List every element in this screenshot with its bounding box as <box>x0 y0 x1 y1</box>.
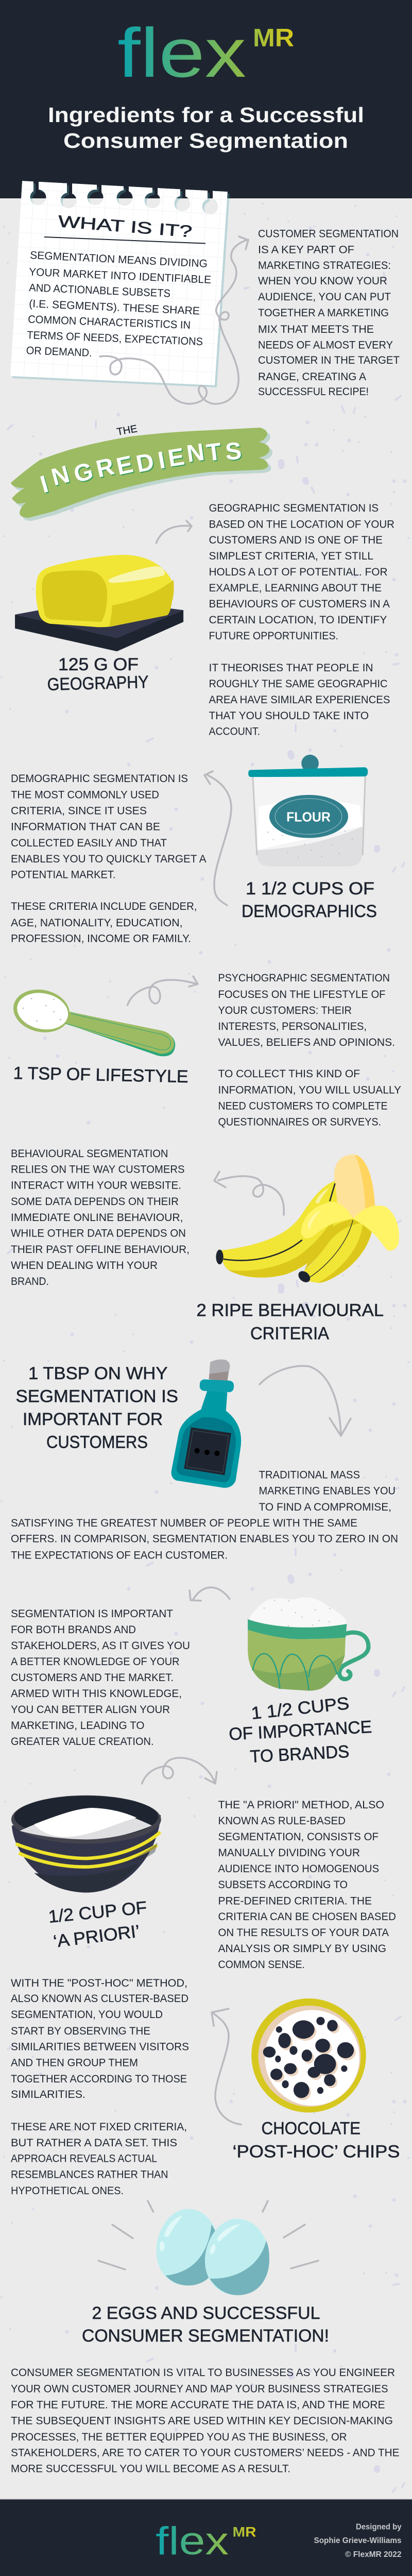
text: demographic segmentation: THE MOST COMMONLY USED <box>11 789 159 801</box>
note heading: WHAT IS IT? <box>57 212 193 241</box>
text: a priori method: COMMON SENSE. <box>218 1959 305 1971</box>
text: traditional mass marketing: OFFERS. IN COMPARISON, SEGMENTATION ENABLES YOU TO ZERO IN ON <box>11 1533 398 1545</box>
note body text: AND ACTIONABLE SUBSETS <box>29 282 171 300</box>
text: post-hoc method: SEGMENTATION, YOU WOULD <box>11 2009 163 2021</box>
footer logo: flex <box>156 2519 229 2563</box>
text: closing paragraph: PROCESSES, THE BETTER EQUIPPED YOU AS THE BUSINESS, OR <box>11 2431 347 2443</box>
note shadow <box>12 183 230 387</box>
designer credits: © FlexMR 2022 <box>345 2550 402 2559</box>
designer credits: Designed by <box>356 2522 402 2532</box>
label: chocolate post-hoc chips <box>233 2119 400 2162</box>
footer logo <box>156 2519 256 2563</box>
title: Consumer Segmentation <box>63 129 348 152</box>
text: segmentation importance: YOU CAN BETTER ALIGN YOUR <box>11 1704 170 1716</box>
text: segmentation importance: CUSTOMERS AND THE MARKET. <box>11 1672 174 1684</box>
label: 1 tbsp on why segmentation is important <box>15 1364 178 1452</box>
text: segmentation importance: ARMED WITH THIS KNOWLEDGE, <box>11 1688 182 1700</box>
text: psychographic segmentation: NEED CUSTOMERS TO COMPLETE <box>218 1100 387 1112</box>
text: traditional mass marketing: TO FIND A COMPROMISE, <box>259 1501 391 1513</box>
text: behavioural segmentation: RELIES ON THE WAY CUSTOMERS <box>11 1163 184 1176</box>
label: 1 tsp of lifestyle: 1 TSP OF LIFESTYLE <box>13 1063 188 1087</box>
arrow: cup to importance text <box>190 1587 230 1601</box>
text: geographic segmentation: HOLDS A LOT OF POTENTIAL. FOR <box>209 566 387 578</box>
text: psychographic segmentation: YOUR CUSTOMERS: THEIR <box>218 1005 352 1016</box>
arrow: squiggle from note to intro text <box>100 236 248 404</box>
rays <box>98 2201 318 2269</box>
text: behavioural segmentation: SOME DATA DEPENDS ON THEIR <box>11 1196 179 1208</box>
icon: bananas <box>216 1155 399 1284</box>
text: post-hoc method: TOGETHER ACCORDING TO THOSE <box>11 2073 187 2085</box>
icon: mixing bowl <box>11 1795 161 1892</box>
label: 2 eggs and successful consumer segmentation: 2 EGGS AND SUCCESSFUL <box>92 2303 320 2323</box>
text: segmentation importance <box>11 1608 190 1748</box>
text: traditional mass marketing <box>11 1469 398 1561</box>
text: customer segmentation intro: CUSTOMER IN THE TARGET <box>258 354 400 366</box>
footer band <box>0 2499 412 2576</box>
text: psychographic segmentation: PSYCHOGRAPHIC SEGMENTATION <box>218 972 390 984</box>
banner brush <box>11 428 269 518</box>
text: geographic segmentation: IT THEORISES THAT PEOPLE IN <box>209 662 373 674</box>
text: traditional mass marketing: SATISFYING THE GREATEST NUMBER OF PEOPLE WITH THE SAME <box>11 1517 357 1529</box>
text: behavioural segmentation: IMMEDIATE ONLINE BEHAVIOUR, <box>11 1212 183 1224</box>
text: demographic segmentation: DEMOGRAPHIC SEGMENTATION IS <box>11 773 188 785</box>
text: psychographic segmentation: QUESTIONNAIRES OR SURVEYS. <box>218 1116 381 1128</box>
text: customer segmentation intro: MARKETING STRATEGIES: <box>258 260 391 272</box>
text: geographic segmentation: CUSTOMERS AND IS ONE OF THE <box>209 534 383 546</box>
text: geographic segmentation: BEHAVIOURS OF CUSTOMERS IN A <box>209 598 390 610</box>
text: demographic segmentation: CRITERIA, SINCE IT USES <box>11 805 147 817</box>
label: 1 1/2 cups of importance to brands: OF IMPORTANCE <box>228 1717 372 1744</box>
text: a priori method: KNOWN AS RULE-BASED <box>218 1815 346 1827</box>
text: customer segmentation intro: CUSTOMER SEGMENTATION <box>258 228 399 240</box>
text: a priori method: ANALYSIS OR SIMPLY BY USING <box>218 1943 386 1955</box>
label: 125 g of geography: GEOGRAPHY <box>47 672 149 694</box>
header logo: MR <box>253 24 294 52</box>
text: post-hoc method: START BY OBSERVING THE <box>11 2025 150 2037</box>
text: closing paragraph: THE SUBSEQUENT INSIGHTS ARE USED WITHIN KEY DECISION-MAKING <box>11 2415 393 2427</box>
text: segmentation importance: GREATER VALUE CREATION. <box>11 1736 153 1748</box>
text: customer segmentation intro: SUCCESSFUL RECIPE! <box>258 386 369 398</box>
arrow: bottle to traditional text <box>260 1366 351 1436</box>
text: geographic segmentation: EXAMPLE, LEARNING ABOUT THE <box>209 582 382 594</box>
text: behavioural segmentation: WHILE OTHER DATA DEPENDS ON <box>11 1227 186 1240</box>
header logo <box>117 14 294 92</box>
text: post-hoc method: AND THEN GROUP THEM <box>11 2057 138 2069</box>
label: chocolate post-hoc chips: CHOCOLATE <box>262 2119 360 2138</box>
text: traditional mass marketing: TRADITIONAL MASS <box>259 1469 360 1481</box>
panel: what is it note <box>10 181 230 387</box>
icon: bottle <box>171 1360 241 1488</box>
label: 1 1/2 cups of demographics: 1 1/2 CUPS OF <box>246 879 374 899</box>
text: geographic segmentation: ACCOUNT. <box>209 725 260 738</box>
text: a priori method: ON THE RESULTS OF YOUR DATA <box>218 1927 389 1939</box>
text: customer segmentation intro: RANGE, CREATING A <box>258 371 366 383</box>
label: 125 g of geography <box>47 655 149 694</box>
text: behavioural segmentation <box>11 1148 190 1287</box>
text: a priori method: AUDIENCE INTO HOMOGENOUS <box>218 1863 379 1875</box>
text: geographic segmentation: GEOGRAPHIC SEGMENTATION IS <box>209 502 379 514</box>
text: behavioural segmentation: BRAND. <box>11 1276 49 1287</box>
text: geographic segmentation: SIMPLEST CRITERIA, YET STILL <box>209 550 373 562</box>
text: traditional mass marketing: MARKETING ENABLES YOU <box>259 1485 396 1497</box>
text: geographic segmentation: ROUGHLY THE SAME GEOGRAPHIC <box>209 678 387 690</box>
text: demographic segmentation: AGE, NATIONALITY, EDUCATION, <box>11 917 182 929</box>
arrow: bowl to a priori text <box>142 1758 217 1784</box>
banner: the ingredients: THE <box>116 423 138 438</box>
label: 1 tbsp on why segmentation is important: SEGMENTATION IS <box>15 1387 178 1406</box>
arrow: cookie to post-hoc text <box>212 2009 241 2125</box>
label: 2 eggs and successful consumer segmentation: CONSUMER SEGMENTATION! <box>82 2326 329 2346</box>
text: segmentation importance: STAKEHOLDERS, AS IT GIVES YOU <box>11 1640 190 1652</box>
icon: two eggs with rays <box>98 2201 318 2295</box>
text: demographic segmentation: THESE CRITERIA INCLUDE GENDER, <box>11 901 197 912</box>
label: 2 ripe behavioural criteria: 2 RIPE BEHAVIOURAL <box>197 1300 384 1320</box>
arrow: to geographic text <box>157 521 192 543</box>
icon: green cup <box>248 1597 368 1691</box>
text: behavioural segmentation: BEHAVIOURAL SEGMENTATION <box>11 1148 168 1160</box>
text: customer segmentation intro: MIX THAT MEETS THE <box>258 324 374 335</box>
note body text <box>26 249 211 359</box>
text: a priori method: PRE-DEFINED CRITERIA. THE <box>218 1895 372 1907</box>
text: geographic segmentation: BASED ON THE LOCATION OF YOUR <box>209 518 394 531</box>
label: 2 ripe behavioural criteria: CRITERIA <box>250 1324 329 1344</box>
text: closing paragraph: YOUR OWN CUSTOMER JOURNEY AND MAP YOUR BUSINESS STRATEGIES <box>11 2383 388 2395</box>
text: psychographic segmentation: INTERESTS, PERSONALITIES, <box>218 1021 367 1032</box>
designer credits <box>314 2522 402 2559</box>
text: a priori method: SEGMENTATION, CONSISTS OF <box>218 1831 379 1843</box>
text: a priori method <box>218 1799 396 1971</box>
text: geographic segmentation: THAT YOU SHOULD TAKE INTO <box>209 710 369 722</box>
designer credits: Sophie Grieve-Williams <box>314 2536 402 2545</box>
text: closing paragraph: CONSUMER SEGMENTATION IS VITAL TO BUSINESSES AS YOU ENGINEER <box>11 2367 395 2379</box>
text: a priori method: MANUALLY DIVIDING YOUR <box>218 1847 360 1859</box>
banner shadow <box>14 431 272 521</box>
text: closing paragraph <box>11 2367 400 2475</box>
note body text: (I.E. SEGMENTS). THESE SHARE <box>29 298 200 317</box>
text: a priori method: CRITERIA CAN BE CHOSEN BASED <box>218 1911 396 1923</box>
label: 125 g of geography: 125 G OF <box>58 655 139 674</box>
text: post-hoc method: APPROACH REVEALS ACTUAL <box>11 2153 157 2165</box>
text: psychographic segmentation <box>218 972 401 1128</box>
header band <box>0 0 412 198</box>
eggs <box>157 2209 269 2295</box>
text: traditional mass marketing: THE EXPECTATIONS OF EACH CUSTOMER. <box>11 1550 228 1561</box>
arrow: to demographic text <box>204 771 231 905</box>
text: demographic segmentation <box>11 773 206 945</box>
label: 2 ripe behavioural criteria <box>197 1300 384 1344</box>
note body text: COMMON CHARACTERISTICS IN <box>28 314 191 331</box>
label: 1 1/2 cups of demographics <box>242 879 377 921</box>
text: customer segmentation intro: IS A KEY PART OF <box>258 244 354 256</box>
label: 1/2 cup of a priori: 1/2 CUP OF <box>47 1898 148 1927</box>
text: demographic segmentation: ENABLES YOU TO QUICKLY TARGET A <box>11 853 206 865</box>
label: 1 1/2 cups of importance to brands <box>228 1693 372 1767</box>
icon: teaspoon <box>9 985 175 1056</box>
text: post-hoc method: HYPOTHETICAL ONES. <box>11 2185 124 2197</box>
text: post-hoc method: SIMILARITIES BETWEEN VISITORS <box>11 2041 189 2053</box>
text: psychographic segmentation: VALUES, BELIEFS AND OPINIONS. <box>218 1037 395 1048</box>
text: segmentation importance: FOR BOTH BRANDS AND <box>11 1624 136 1636</box>
label: 1 tbsp on why segmentation is important: IMPORTANT FOR <box>23 1410 163 1429</box>
label: 1 1/2 cups of demographics: DEMOGRAPHICS <box>242 902 377 921</box>
text: psychographic segmentation: TO COLLECT THIS KIND OF <box>218 1068 360 1080</box>
title: Ingredients for a Successful <box>48 103 364 127</box>
text: customer segmentation intro: NEEDS OF ALMOST EVERY <box>258 339 393 351</box>
label: 1 1/2 cups of importance to brands: 1 1/2 CUPS <box>250 1693 350 1723</box>
text: psychographic segmentation: FOCUSES ON THE LIFESTYLE OF <box>218 989 385 1001</box>
text: closing paragraph: FOR THE FUTURE. THE MORE ACCURATE THE DATA IS, AND THE MORE <box>11 2399 385 2411</box>
text: behavioural segmentation: WHEN DEALING WITH YOUR <box>11 1260 158 1272</box>
text: segmentation importance: MARKETING, LEADING TO <box>11 1720 144 1732</box>
icon: butter on a board <box>15 555 183 651</box>
note body text: TERMS OF NEEDS, EXPECTATIONS <box>27 329 203 348</box>
text: geographic segmentation: AREA HAVE SIMILAR EXPERIENCES <box>209 694 390 706</box>
icon: chocolate chip cookie <box>251 1998 366 2112</box>
text: psychographic segmentation: INFORMATION, YOU WILL USUALLY <box>218 1084 401 1096</box>
arrow: spoon to psychographic text <box>128 976 198 1005</box>
label: 1/2 cup of a priori <box>47 1898 148 1952</box>
text: a priori method: SUBSETS ACCORDING TO <box>218 1879 348 1891</box>
title <box>48 103 364 152</box>
text: geographic segmentation <box>209 502 394 738</box>
text: customer segmentation intro: TOGETHER A MARKETING <box>258 307 389 319</box>
text: segmentation importance: A BETTER KNOWLEDGE OF YOUR <box>11 1656 179 1668</box>
label: chocolate post-hoc chips: ‘POST-HOC’ CHIPS <box>233 2142 400 2162</box>
text: demographic segmentation: PROFESSION, INCOME OR FAMILY. <box>11 933 191 945</box>
label: 1 1/2 cups of importance to brands: TO BRANDS <box>249 1742 350 1767</box>
text: customer segmentation intro: WHEN YOU KNOW YOUR <box>258 275 387 287</box>
text: a priori method: THE "A PRIORI" METHOD, ALSO <box>218 1799 384 1811</box>
text: post-hoc method: THESE ARE NOT FIXED CRITERIA, <box>11 2121 187 2133</box>
footer logo: MR <box>233 2524 256 2540</box>
text: post-hoc method <box>11 1977 189 2197</box>
text: customer segmentation intro <box>258 228 400 398</box>
text: post-hoc method: WITH THE "POST-HOC" METHOD, <box>11 1977 187 1989</box>
text: closing paragraph: STAKEHOLDERS, ARE TO CATER TO YOUR CUSTOMERS’ NEEDS - AND THE <box>11 2447 400 2459</box>
text: demographic segmentation: POTENTIAL MARKET. <box>11 869 115 881</box>
text: demographic segmentation: COLLECTED EASILY AND THAT <box>11 837 167 849</box>
text: geographic segmentation: CERTAIN LOCATION, TO IDENTIFY <box>209 614 387 626</box>
banner: the ingredients <box>11 423 272 521</box>
text: demographic segmentation: INFORMATION THAT CAN BE <box>11 821 160 833</box>
text: geographic segmentation: FUTURE OPPORTUNITIES. <box>209 630 338 642</box>
label: 2 eggs and successful consumer segmentation <box>82 2303 329 2346</box>
note body text: OR DEMAND. <box>26 345 92 359</box>
label: 1 tbsp on why segmentation is important: 1 TBSP ON WHY <box>28 1364 168 1383</box>
text: segmentation importance: SEGMENTATION IS IMPORTANT <box>11 1608 173 1620</box>
label: 1 tbsp on why segmentation is important: CUSTOMERS <box>46 1432 148 1452</box>
header logo: flex <box>117 14 246 92</box>
icon: flour jar <box>248 755 368 867</box>
text: behavioural segmentation: THEIR PAST OFFLINE BEHAVIOUR, <box>11 1244 190 1256</box>
label: 1/2 cup of a priori: ‘A PRIORI’ <box>52 1922 141 1952</box>
arrow: bananas to behavioural text <box>214 1172 284 1215</box>
text: post-hoc method: BUT RATHER A DATA SET. THIS <box>11 2137 177 2149</box>
text: post-hoc method: SIMILARITIES. <box>11 2089 85 2100</box>
note body text: SEGMENTATION MEANS DIVIDING <box>30 249 208 270</box>
note body text: YOUR MARKET INTO IDENTIFIABLE <box>29 266 211 286</box>
text: behavioural segmentation: INTERACT WITH YOUR WEBSITE. <box>11 1180 181 1191</box>
note paper <box>10 181 228 385</box>
text: closing paragraph: MORE SUCCESSFUL YOU WILL BECOME AS A RESULT. <box>11 2463 290 2475</box>
banner lettering: INGREDIENTS <box>37 436 243 498</box>
text: post-hoc method: RESEMBLANCES RATHER THAN <box>11 2169 168 2180</box>
text: post-hoc method: ALSO KNOWN AS CLUSTER-BASED <box>11 1993 188 2005</box>
icon: flour jar: FLOUR <box>286 809 331 824</box>
text: customer segmentation intro: AUDIENCE, YOU CAN PUT <box>258 291 391 303</box>
